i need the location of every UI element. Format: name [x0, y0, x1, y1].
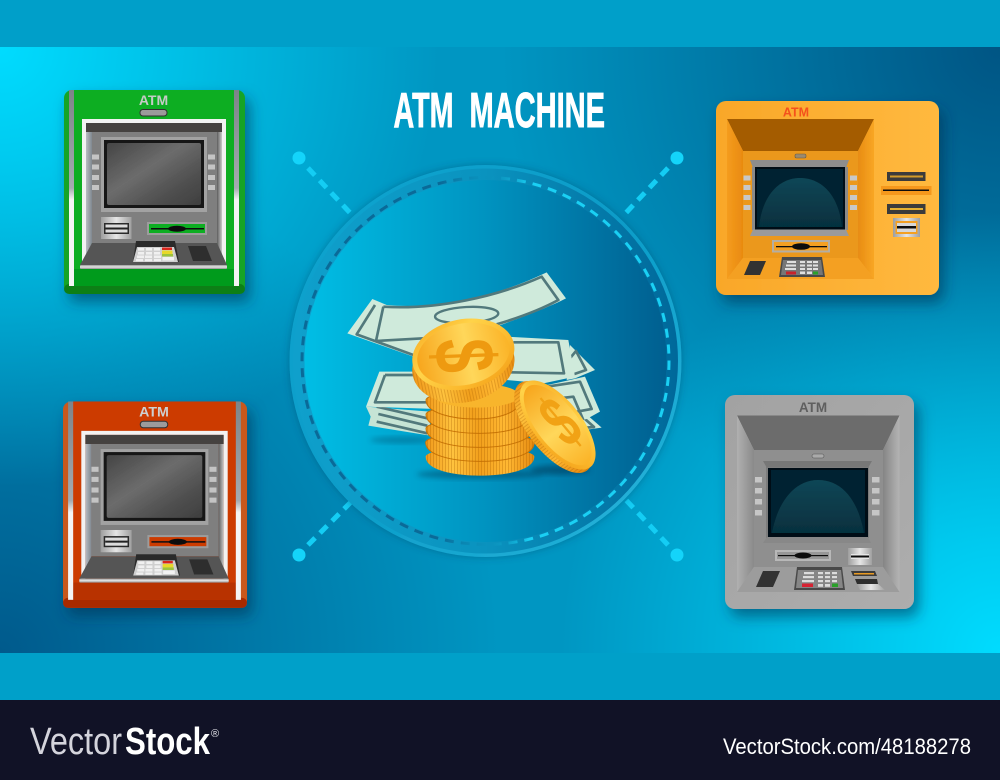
- ATM: orange: [716, 101, 939, 295]
- ATM: red: [63, 401, 247, 608]
- connector: bottom left: [292, 502, 351, 562]
- body: [63, 401, 247, 608]
- money: banknotes and coins: [347, 272, 609, 486]
- cash slot: [147, 535, 208, 548]
- shelf: [79, 556, 229, 583]
- coin shadows: [370, 437, 590, 479]
- leaning coin: [500, 368, 609, 486]
- card reader: [101, 530, 132, 552]
- card pad: [188, 246, 212, 261]
- banknotes: [347, 272, 602, 436]
- card reader: [893, 218, 920, 237]
- cash slot: [147, 222, 207, 235]
- footer logo: Stock: [125, 721, 211, 763]
- footer logo: Vector: [30, 721, 122, 763]
- recess: [85, 435, 224, 576]
- side strips: [68, 401, 241, 600]
- top band: [0, 0, 1000, 47]
- status slot: [795, 154, 806, 158]
- central circle: [290, 165, 682, 557]
- recess: [86, 123, 222, 262]
- ATM label: ATM: [139, 405, 169, 421]
- screen: [101, 137, 207, 212]
- side buttons: [755, 477, 880, 516]
- body: [716, 101, 939, 295]
- ATM label: ATM: [783, 106, 809, 120]
- footer logo: ®: [211, 728, 219, 740]
- screen: [101, 449, 208, 525]
- ATM label: ATM: [799, 400, 827, 415]
- side buttons: [744, 176, 857, 210]
- large top coin: $: [416, 337, 513, 374]
- status slot: [812, 454, 824, 458]
- recess: [727, 119, 874, 279]
- screen: [763, 461, 872, 543]
- card reader: [848, 548, 872, 565]
- cash slot: [772, 240, 830, 252]
- indicator: [140, 110, 167, 116]
- card pad: [189, 559, 213, 575]
- title: ATM: [394, 84, 454, 138]
- recess: [737, 416, 900, 592]
- side strips: [69, 90, 239, 286]
- footer bar: [0, 700, 1000, 780]
- coin stack: [426, 384, 534, 476]
- bottom band: [0, 653, 1000, 700]
- keypad: [794, 567, 845, 590]
- right panel: slots: [881, 172, 932, 214]
- keypad: [133, 241, 179, 262]
- connector: bottom right: [626, 500, 684, 562]
- ATM: green: [64, 90, 245, 294]
- body: [725, 395, 914, 609]
- indicator: [140, 421, 168, 428]
- main gradient background: [0, 47, 1000, 653]
- side buttons: [91, 467, 217, 503]
- card pad: [756, 571, 780, 587]
- keypad: [779, 257, 825, 277]
- white frame: [81, 431, 228, 580]
- footer image id: VectorStock.com/48188278: [723, 734, 971, 759]
- large top coin: [405, 309, 522, 412]
- shelf: [80, 243, 227, 269]
- title: [394, 84, 605, 138]
- cash slot: [775, 550, 831, 561]
- body: [64, 90, 245, 294]
- receipt slots: [851, 571, 885, 590]
- leaning coin: $: [524, 382, 597, 463]
- side buttons: [92, 154, 215, 190]
- screen: [750, 160, 849, 236]
- card reader: [101, 217, 132, 239]
- connector: top right: [623, 152, 684, 216]
- connector: top left: [292, 152, 353, 216]
- ATM label: ATM: [139, 92, 168, 108]
- card pad: [744, 261, 766, 275]
- white frame: [82, 119, 226, 266]
- footer logo: [30, 721, 219, 763]
- title: MACHINE: [470, 84, 605, 138]
- ATM: grey: [725, 395, 914, 609]
- keypad: [133, 554, 180, 576]
